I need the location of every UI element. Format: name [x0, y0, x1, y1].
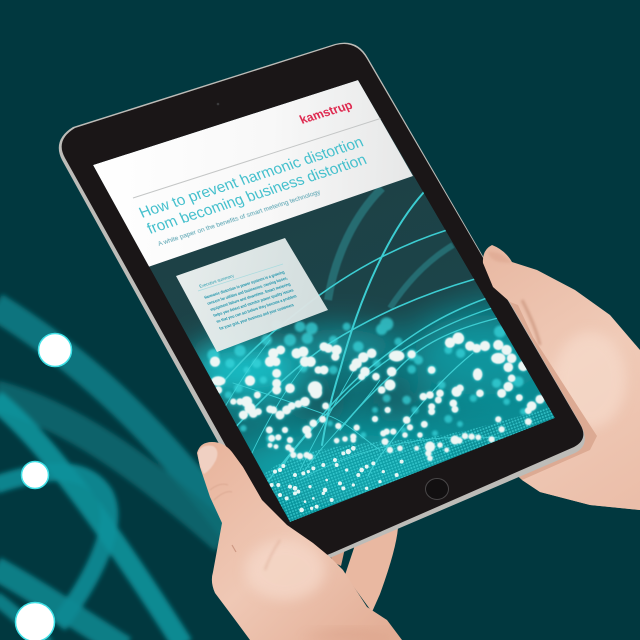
ribbon: bright descending sweep — [0, 400, 183, 640]
halftone dot field — [264, 407, 554, 522]
ribbon: looping curve — [0, 472, 109, 625]
card text: helps you detect and monitor power quality issues — [212, 287, 295, 318]
finger: small — [328, 548, 345, 566]
card text — [203, 269, 297, 331]
card text: so that you can act before they become a problem — [215, 293, 297, 324]
glowing fibre ribbons — [0, 306, 232, 640]
camera — [217, 103, 219, 105]
subtitle: A white paper on the benefits of smart metering technology — [157, 189, 322, 248]
tablet — [59, 43, 585, 572]
card text: equipment failure and downtime. Smart metering — [209, 281, 292, 312]
node: upper — [38, 334, 72, 366]
home button — [426, 478, 448, 500]
summary card — [176, 238, 328, 352]
tablet: silver edge — [59, 43, 585, 572]
wide soft fibres — [328, 188, 453, 308]
card heading: Executive summary — [198, 273, 235, 289]
left hand shading and thumbnail — [198, 445, 348, 636]
title line 1: How to prevent harmonic distortion — [137, 134, 366, 222]
finger: index — [345, 528, 398, 612]
ribbon: lower sweep — [0, 568, 125, 640]
node: lower — [16, 602, 54, 640]
title line 2: from becoming business distortion — [145, 151, 369, 238]
card text: for your grid, your business and your customers — [218, 302, 295, 331]
bright white bokeh dots — [210, 333, 544, 461]
screen — [93, 80, 570, 530]
node: middle — [22, 462, 48, 488]
header divider — [133, 118, 382, 198]
card text: concern for utilities and businesses, causing losses, — [206, 275, 288, 306]
card divider — [198, 264, 283, 291]
ribbon: lowest sweep — [0, 598, 48, 640]
screen background — [93, 80, 555, 522]
fingers behind tablet — [328, 275, 640, 612]
header panel — [93, 80, 413, 267]
right hand shading — [488, 252, 626, 428]
right hand finger over tablet — [483, 245, 640, 510]
small white dots on halftone — [270, 446, 404, 512]
glowing nodes — [16, 334, 72, 640]
tablet: black bezel — [62, 44, 583, 568]
logo: kamstrup: kamstrup — [297, 98, 355, 127]
left hand over tablet — [197, 442, 402, 640]
thin bright fibres — [225, 192, 504, 482]
palm: right hand behind tablet — [498, 275, 640, 510]
ribbon: upper sweep — [0, 306, 232, 530]
card text: Harmonic distortion in power systems is a growing — [203, 269, 286, 300]
screen glow band — [185, 315, 545, 504]
ribbon: wide middle sweep — [0, 395, 225, 540]
translucent bokeh dots — [207, 317, 527, 442]
